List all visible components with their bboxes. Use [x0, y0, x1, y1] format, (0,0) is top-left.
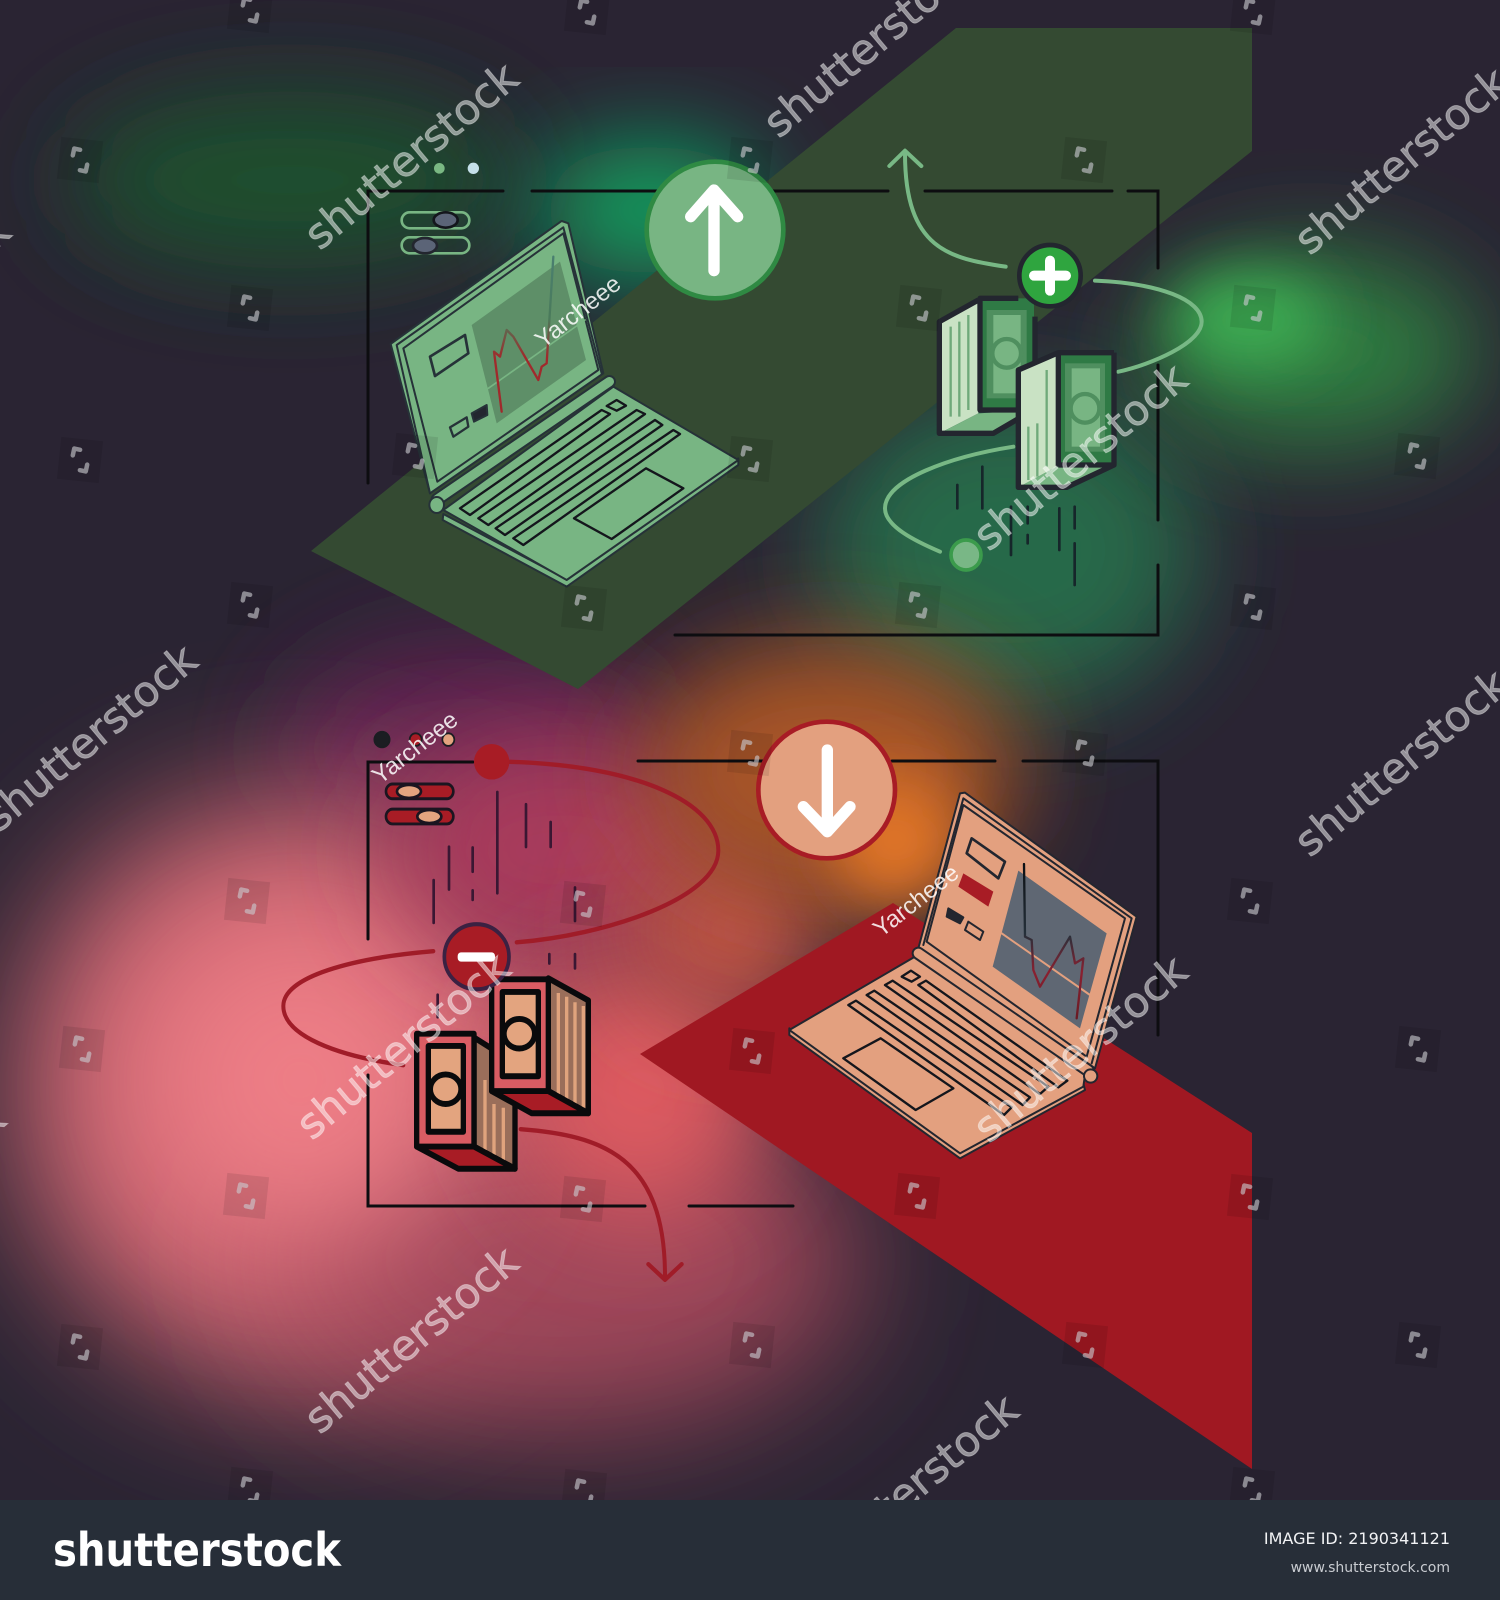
footer logo: shutterstock: [53, 1523, 342, 1577]
indicator dots red: [374, 732, 454, 747]
badge: up arrow: [647, 162, 783, 298]
dot: start of green path: [951, 540, 981, 570]
curve: rising money path with arrow: [885, 151, 1202, 552]
panel: upper gain scene: [391, 163, 738, 587]
icon: green money stacks: [939, 245, 1114, 487]
footer website: www.shutterstock.com: [1291, 1560, 1450, 1576]
red bundle right: [492, 978, 588, 1113]
minus badge: [444, 924, 509, 989]
green bundle one: [939, 298, 1035, 433]
author credit text: [367, 270, 964, 943]
icon: red money stacks: [417, 978, 588, 1169]
watermark text: shutterstock: [295, 52, 528, 259]
toggle switches red: [386, 784, 453, 824]
frame: upper panel outline: [368, 191, 1158, 635]
watermark text: shutterstock: [795, 1384, 1028, 1591]
panel: lower loss scene: [283, 732, 718, 1280]
plus badge: [1019, 245, 1081, 306]
watermark text: shutterstock: [964, 353, 1197, 560]
red bundle left: [417, 1034, 515, 1169]
laptop orange: [789, 793, 1137, 1158]
indicator dots green: [434, 163, 479, 174]
dot: start of red path: [474, 744, 509, 780]
laptop green: [391, 221, 738, 587]
badge: down arrow: [758, 722, 895, 858]
watermark text: shutterstock: [964, 945, 1197, 1152]
green bundle two: [1018, 353, 1114, 487]
footer bar: [0, 1500, 1500, 1600]
author credit text: Yarcheee: [367, 706, 463, 790]
watermark text: shutterstock: [287, 942, 520, 1149]
falling dashes red: [434, 792, 575, 1017]
frame: lower panel outline: [368, 761, 1158, 1206]
falling dashes green: [957, 467, 1075, 585]
watermark text: shutterstock: [295, 1236, 528, 1443]
panel: green isometric floor: [311, 28, 1252, 689]
footer image id: IMAGE ID: 2190341121: [1264, 1529, 1450, 1548]
panel: red isometric floor: [640, 903, 1252, 1469]
curve: falling money path with arrow: [283, 762, 718, 1280]
author credit text: Yarcheee: [868, 859, 964, 943]
author credit text: Yarcheee: [530, 270, 626, 354]
toggle switches green: [402, 212, 469, 253]
